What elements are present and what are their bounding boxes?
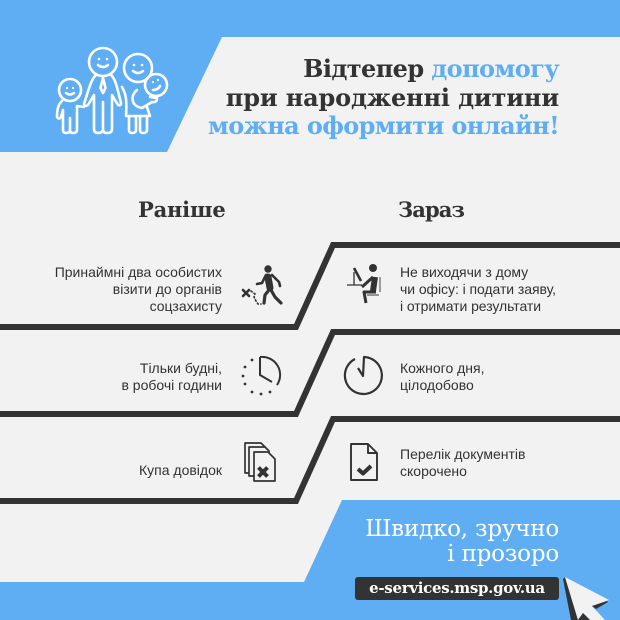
slogan: і прозоро: [447, 541, 559, 567]
heading: now: Зараз: [398, 197, 464, 222]
text: now row 3: [400, 446, 525, 479]
text: now row 1: чи офісу: і подати заяву,: [400, 281, 556, 297]
text: now row 1: Не виходячи з дому: [400, 264, 528, 280]
icon: partial clock: [242, 357, 280, 395]
icon: family: [57, 48, 167, 133]
text: now row 2: Кожного дня,: [400, 360, 485, 376]
text: now row 2: [400, 360, 485, 393]
slogan: Швидко, зручно: [365, 516, 559, 542]
icon: walking person: [243, 265, 281, 304]
icon: family faces: [66, 58, 159, 89]
text: before row 1: соцзахисту: [150, 298, 222, 314]
icon: cursor arrow: [563, 577, 609, 620]
title: [208, 54, 560, 140]
icon: clock: [345, 357, 382, 394]
divider line row 3: [0, 419, 620, 501]
icon: document with check: [351, 444, 377, 480]
slogan: [365, 516, 559, 567]
text: now row 3: скорочено: [400, 463, 467, 479]
heading: before: Раніше: [138, 197, 225, 222]
title: Відтепер допомогу: [303, 54, 559, 83]
text: now row 3: Перелік документів: [400, 446, 525, 462]
divider line row 2: [0, 332, 620, 414]
text: now row 1: і отримати результати: [400, 298, 541, 314]
icon: document stack with cross: [245, 443, 275, 481]
bottom blue banner: [0, 500, 620, 620]
icon: person at computer: [347, 264, 380, 303]
title: можна оформити онлайн!: [208, 111, 559, 140]
text: now row 2: цілодобово: [400, 377, 474, 393]
text: before row 1: візити до органів: [113, 281, 222, 297]
website badge: [355, 577, 559, 600]
text: before row 2: в робочі години: [121, 377, 222, 393]
text: before row 1: [55, 264, 222, 314]
top blue banner: [0, 0, 620, 152]
website badge: e-services.msp.gov.ua: [369, 579, 545, 597]
text: before row 3: Купа довідок: [139, 462, 222, 478]
title: при народженні дитини: [226, 82, 559, 112]
text: before row 1: Принаймні два особистих: [55, 264, 222, 280]
text: now row 1: [400, 264, 556, 314]
text: before row 2: Тільки будні,: [140, 360, 222, 376]
text: before row 2: [121, 360, 222, 393]
divider line row 1: [0, 245, 620, 327]
